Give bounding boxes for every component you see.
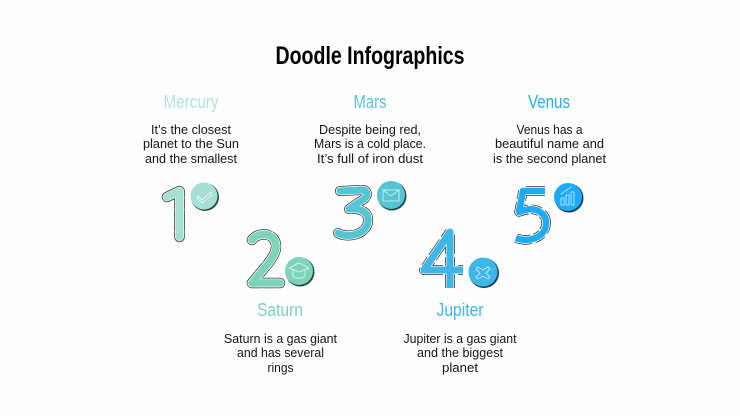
text: Saturn description: Saturn is a gas giant (224, 332, 337, 346)
panel: Mercury (143, 92, 239, 237)
text: Venus description: Venus has a (516, 123, 582, 137)
icon: check circle (190, 182, 219, 211)
text: Saturn description: and has several (237, 346, 324, 360)
text: Saturn description: rings (268, 361, 294, 375)
number 4 (424, 232, 463, 288)
text: Mercury description: planet to the Sun (143, 137, 239, 151)
text: Jupiter description: planet (442, 361, 479, 375)
title: Doodle Infographics (276, 42, 464, 70)
text: Mercury description: and the smallest (145, 152, 237, 166)
text: Mars description: Mars is a cold place. (314, 137, 426, 151)
panel: Venus (493, 92, 606, 240)
icon: chart circle (554, 183, 584, 212)
text: Mercury description: It’s the closest (151, 123, 231, 137)
panel: Jupiter (404, 232, 517, 375)
heading: Venus: Venus (528, 92, 570, 112)
text: Saturn description (224, 332, 337, 375)
text: Jupiter description (404, 332, 517, 375)
icon: graduation cap circle (285, 257, 314, 286)
text: Jupiter description: Jupiter is a gas giant (404, 332, 517, 346)
heading: Mercury: Mercury (164, 92, 218, 112)
number 1 (167, 191, 180, 237)
icon: cross circle (468, 258, 499, 288)
text: Jupiter description: and the biggest (417, 346, 503, 360)
text: Venus description: is the second planet (493, 152, 606, 166)
heading: Jupiter: Jupiter (436, 300, 484, 320)
heading: Mars: Mars (354, 92, 386, 112)
text: Venus description (493, 123, 606, 166)
text: Venus description: beautiful name and (495, 137, 604, 151)
number 5 (516, 191, 546, 240)
text: Mars description: It’s full of iron dust (317, 152, 424, 166)
text: Mercury description (143, 123, 239, 166)
text: Mars description: Despite being red, (319, 123, 421, 137)
heading: Saturn: Saturn (257, 300, 303, 320)
number 2 (252, 234, 280, 283)
number 3 (338, 190, 368, 235)
panel: Mars (314, 92, 426, 235)
icon: envelope circle (377, 181, 406, 210)
panel: Saturn (224, 234, 337, 375)
text: Mars description (314, 123, 426, 166)
